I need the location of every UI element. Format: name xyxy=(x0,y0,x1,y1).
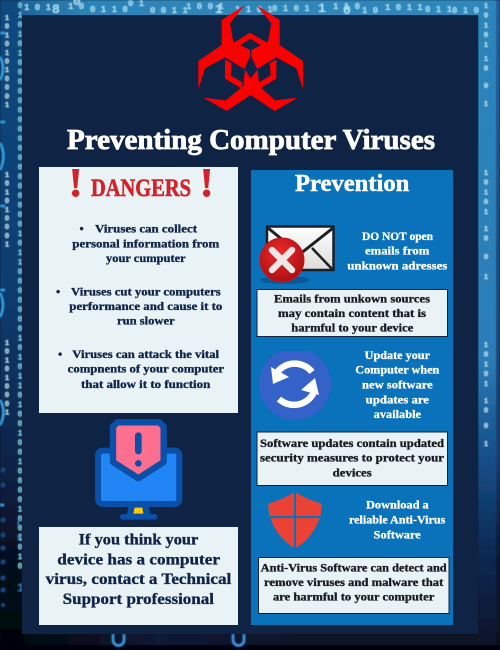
update tip: Computer when xyxy=(355,363,440,377)
update tip: available xyxy=(374,407,422,421)
background: binary code texture: C xyxy=(17,533,24,545)
email tip: DO NOT open xyxy=(362,229,433,243)
background: binary code texture: 1 0 1 1 xyxy=(385,3,423,13)
icon: monitor with alert shield xyxy=(98,422,179,520)
danger point: data collection xyxy=(72,222,219,265)
update tip: updates are xyxy=(366,392,430,406)
dangers heading: ! xyxy=(69,160,82,205)
background: binary code texture: 1 0 0 1 xyxy=(186,2,224,12)
antivirus tip xyxy=(349,498,446,541)
title: Preventing Computer Viruses xyxy=(67,124,435,156)
background: binary code texture: 1 xyxy=(17,583,24,595)
danger point: slower performance xyxy=(56,284,222,328)
danger point: vital components xyxy=(58,347,225,391)
icon: update arrows xyxy=(259,348,331,420)
danger point: data collection: • xyxy=(80,222,84,236)
background: binary code texture: 0 xyxy=(482,83,490,93)
antivirus tip: Software xyxy=(374,527,421,541)
zeros at the bottom edge xyxy=(113,634,244,646)
dangers heading: DANGERS xyxy=(91,175,191,202)
update tip: Update your xyxy=(365,348,431,362)
dangers heading xyxy=(69,160,213,205)
antivirus explanation box: remove viruses and malware that xyxy=(264,575,443,589)
update tip xyxy=(355,348,440,421)
panel: dangers xyxy=(39,160,238,413)
antivirus explanation box: are harmful to your computer xyxy=(273,590,435,604)
background: binary code texture: 8 xyxy=(52,2,60,17)
icon: envelope with red cross xyxy=(260,226,334,284)
callout: contact technical support: If you think your xyxy=(79,532,198,549)
danger point: vital components: compnents of your computer xyxy=(68,362,225,376)
background: binary code texture: C xyxy=(17,519,24,531)
callout: contact technical support xyxy=(39,527,238,625)
update explanation box: security measures to protect your xyxy=(260,451,445,465)
background: binary code texture: 1 xyxy=(318,1,326,16)
email tip: unknown adresses xyxy=(347,258,448,272)
antivirus explanation box xyxy=(258,558,449,614)
icon: red biohazard symbol xyxy=(198,5,303,111)
background: binary code texture: 0 xyxy=(343,3,351,18)
background: binary code texture: 1 xyxy=(482,101,490,111)
email explanation box: Emails from unkown sources xyxy=(274,291,430,305)
update tip: new software xyxy=(362,378,433,392)
danger point: data collection: Viruses can collect xyxy=(95,222,197,236)
danger point: vital components: Viruses can attack the vital xyxy=(72,347,220,361)
danger point: slower performance: • xyxy=(56,284,60,298)
prevention heading: Prevention xyxy=(295,171,409,197)
background: binary code texture: 1 xyxy=(482,441,490,451)
update explanation box: devices xyxy=(333,465,372,479)
update explanation box: Software updates contain updated xyxy=(260,436,444,450)
email explanation box: harmful to your device xyxy=(291,321,414,335)
callout: contact technical support: device has a computer xyxy=(57,551,220,568)
danger point: slower performance: performance and cause it to xyxy=(69,299,222,313)
background: binary code texture: 1 0 xyxy=(362,6,378,16)
background: binary code texture: 10101 xyxy=(482,170,490,218)
background: binary code texture: 1 xyxy=(482,274,490,284)
background: binary code texture: 0 xyxy=(482,254,490,264)
email tip: emails from xyxy=(365,244,429,258)
antivirus tip: reliable Anti-Virus xyxy=(349,512,446,526)
background: binary code texture: 1 xyxy=(215,2,223,17)
background: binary code texture: 101010001 xyxy=(3,340,11,418)
update explanation box xyxy=(257,432,448,486)
danger point: vital components: that allow it to function xyxy=(81,377,211,391)
danger point: slower performance: run slower xyxy=(117,314,175,328)
callout: contact technical support: virus, contact a Technical xyxy=(46,571,232,588)
icon: red shield xyxy=(268,492,322,548)
dangers heading: ! xyxy=(200,160,213,205)
email explanation box: may contain content that is xyxy=(278,306,426,320)
background: binary code texture: 10101 xyxy=(482,342,490,390)
danger point: slower performance: Viruses cut your computers xyxy=(71,284,221,298)
email tip xyxy=(347,229,448,272)
email explanation box xyxy=(257,290,448,336)
background: binary code texture: 0 1 0 1 xyxy=(272,4,310,14)
background: binary code texture: 1 1 0 xyxy=(333,2,360,12)
antivirus tip: Download a xyxy=(366,498,429,512)
danger point: data collection: your cumputer xyxy=(106,251,186,265)
background: binary code texture: 010101000000000000000000101100000001010110100100100001001010 xyxy=(16,2,24,572)
background: binary code texture: 0 1 1 0 xyxy=(90,5,128,15)
background: binary code texture: 101010001 xyxy=(3,172,11,250)
background: binary code texture: 10 xyxy=(482,398,490,417)
left digit columns: 10101010001 xyxy=(3,15,11,111)
background: binary code texture: 10 xyxy=(482,56,490,75)
right digit columns: 10101 xyxy=(482,3,490,52)
antivirus explanation box: Anti-Virus Software can detect and xyxy=(261,560,447,574)
background: binary code texture: 0 xyxy=(482,423,490,433)
big blurred glyph fragments on the left edge xyxy=(0,33,5,505)
background: binary code texture: 10 xyxy=(482,226,490,245)
background: binary code texture: 0 1 0 xyxy=(452,6,479,16)
danger point: vital components: • xyxy=(58,347,62,361)
panel: prevention xyxy=(251,170,453,625)
danger point: data collection: personal information from xyxy=(72,236,219,250)
background: binary code texture: 0 0 1 1 xyxy=(150,6,188,16)
background: binary code texture: 1 0 xyxy=(68,2,84,12)
callout: contact technical support: Support professional xyxy=(63,591,215,608)
background: binary code texture: 1 0 1 xyxy=(24,3,52,13)
background: binary code texture: 0 1 1 xyxy=(425,5,453,15)
background: binary code texture: 1 1 0 1 xyxy=(235,5,273,15)
